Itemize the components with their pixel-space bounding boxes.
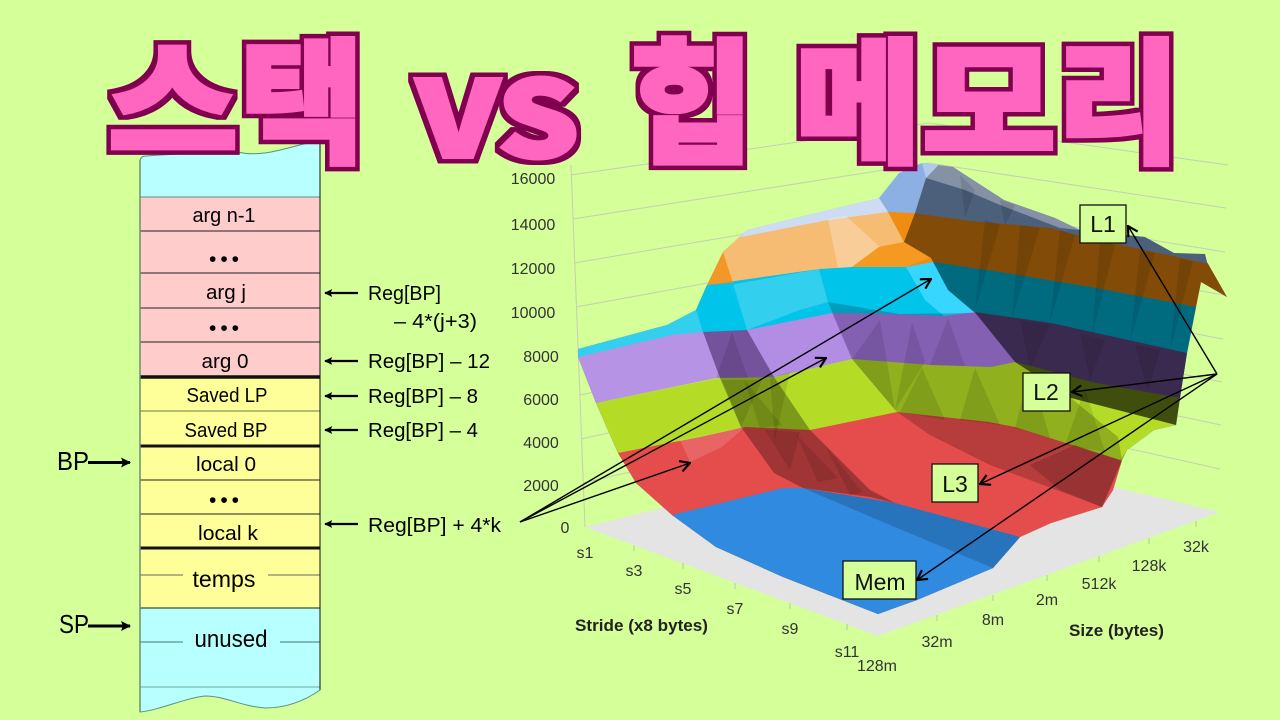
label: Mem: Mem — [854, 569, 906, 595]
stride axis labels: s9 — [782, 621, 799, 638]
light purple lobe — [747, 313, 852, 377]
value axis labels: 2000 — [523, 478, 559, 495]
SP pointer — [59, 609, 130, 639]
stack row dividers — [140, 140, 320, 712]
offset arrows — [325, 293, 358, 524]
stack cell labels: temps — [192, 566, 256, 592]
label: L1: L1 — [1090, 211, 1116, 237]
arc shadow on blue — [803, 488, 1020, 568]
orange left shade — [707, 252, 733, 285]
stack: saved and locals yellow — [140, 377, 320, 608]
label: Mem — [843, 561, 916, 599]
stride axis labels — [575, 545, 859, 661]
stride axis labels: Stride (x8 bytes) — [575, 616, 708, 635]
deep dark lower red — [1030, 445, 1127, 507]
offset labels: Reg[BP] – 12 — [368, 351, 490, 373]
SP pointer: SP — [59, 609, 89, 639]
pale band on lavender — [741, 198, 888, 237]
label: L3: L3 — [942, 471, 968, 497]
BP pointer: BP — [57, 446, 89, 476]
label: L2 — [1023, 373, 1070, 411]
arc shadow: left valley — [703, 330, 895, 503]
stack cell labels: arg 0 — [202, 351, 248, 373]
size axis labels: 128k — [1132, 558, 1167, 575]
size axis labels: 512k — [1082, 576, 1117, 593]
central orange facet — [852, 242, 931, 267]
3D memory mountain chart — [512, 122, 1228, 671]
chart back wall grid — [571, 123, 1228, 527]
arrows: local variables to surface — [520, 279, 931, 522]
pale orange highlight — [828, 216, 880, 268]
stack cell labels: local k — [198, 523, 259, 545]
offset labels: Reg[BP] – 8 — [368, 386, 478, 408]
size axis labels: 2m — [1036, 592, 1058, 609]
stack: args pink — [140, 197, 320, 377]
value axis labels: 4000 — [523, 435, 559, 452]
title: 택 — [240, 0, 364, 191]
top ridge highlight — [922, 163, 1080, 230]
stack cell labels: arg j — [206, 282, 246, 304]
title — [108, 0, 1180, 191]
offset labels: Reg[BP] — [368, 283, 441, 305]
light orange and top — [707, 198, 904, 285]
offset labels: – 4*(j+3) — [394, 311, 477, 333]
value axis labels: 14000 — [511, 217, 555, 234]
value axis labels: 8000 — [523, 349, 559, 366]
stride axis labels: s11 — [835, 644, 859, 661]
mountain surface — [578, 163, 1227, 614]
light cyan lobe — [730, 269, 828, 330]
stride axis labels: s5 — [675, 581, 692, 598]
stack cell labels: Saved BP — [184, 420, 268, 442]
cyan left shade — [696, 283, 747, 332]
surface facets — [716, 175, 1193, 495]
title: 모 — [922, 0, 1056, 188]
stack cell labels: Saved LP — [186, 385, 268, 407]
value axis labels: 12000 — [511, 261, 555, 278]
right face shadow — [904, 150, 1240, 425]
pale red highlight — [680, 427, 745, 462]
stride axis labels: s3 — [626, 563, 643, 580]
title: VS — [416, 36, 579, 188]
light left lobe — [578, 307, 720, 403]
title: 힙 — [630, 0, 754, 191]
value axis labels: 10000 — [511, 305, 555, 322]
band: orange — [578, 212, 1227, 614]
offset labels: Reg[BP] – 4 — [368, 420, 478, 442]
band: red — [618, 412, 1122, 614]
value axis labels: 0 — [561, 520, 570, 537]
value axis labels — [511, 171, 570, 537]
title: 스 — [108, 0, 238, 188]
band: cyan — [578, 262, 1196, 614]
arrows: cache levels — [917, 226, 1217, 580]
stack cell labels: ••• — [209, 489, 239, 512]
BP pointer — [57, 446, 130, 476]
label: L2: L2 — [1033, 379, 1059, 405]
stack: top unused cyan — [140, 140, 320, 197]
stack cell labels — [184, 205, 268, 653]
stack: bottom unused cyan — [140, 608, 320, 712]
stack cell labels: arg n-1 — [192, 205, 256, 227]
stack frame diagram — [57, 140, 502, 712]
title: 리 — [1057, 0, 1180, 191]
band: purple — [578, 312, 1187, 612]
stack cell labels: ••• — [209, 317, 239, 340]
size axis labels: Size (bytes) — [1069, 621, 1164, 640]
stack cell labels: unused — [194, 626, 268, 653]
chart floor — [585, 443, 1220, 636]
band: yellow green — [596, 359, 1180, 614]
arc shadow: central valley — [828, 302, 1122, 507]
floor tick marks — [634, 521, 1196, 630]
band: L1 top — [578, 163, 1227, 359]
title: 메 — [795, 0, 921, 191]
size axis labels: 32m — [921, 634, 953, 651]
label: L1 — [1080, 205, 1126, 243]
value axis labels: 16000 — [511, 171, 555, 188]
stack cell labels: ••• — [209, 248, 239, 271]
deep right shadow — [975, 312, 1187, 425]
offset labels — [368, 283, 502, 537]
label: L3 — [932, 464, 978, 502]
size axis labels: 32k — [1183, 539, 1210, 556]
stride axis labels: s1 — [577, 545, 594, 562]
band: blue — [672, 488, 1020, 614]
size axis labels — [857, 539, 1210, 675]
value axis labels: 6000 — [523, 392, 559, 409]
central cyan highlight — [906, 262, 975, 316]
size axis labels: 128m — [857, 658, 897, 675]
offset labels: Reg[BP] + 4*k — [368, 515, 502, 537]
size axis labels: 8m — [982, 612, 1004, 629]
stride axis labels: s7 — [727, 601, 744, 618]
stack cell labels: local 0 — [196, 454, 256, 476]
